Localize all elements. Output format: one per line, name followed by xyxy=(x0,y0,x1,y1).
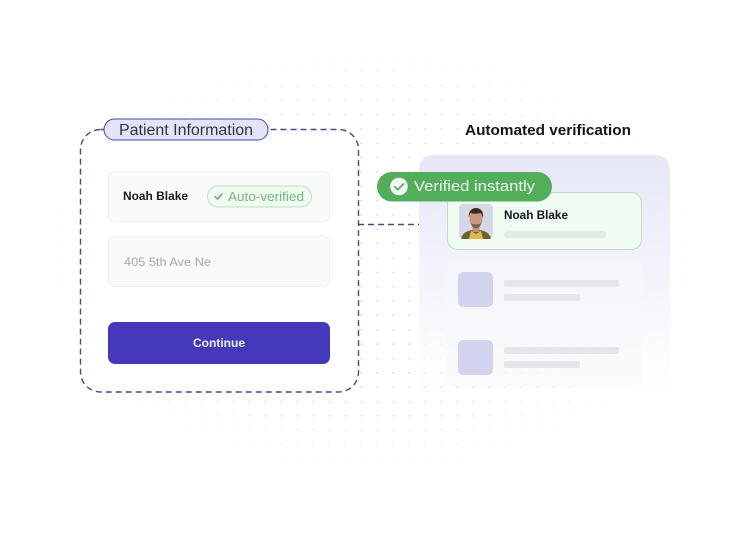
patient name: Noah Blake xyxy=(504,208,568,222)
skeleton row 1 xyxy=(447,260,642,319)
panel: automated verification xyxy=(419,155,670,417)
button: continue xyxy=(108,322,330,364)
button: continue: Continue xyxy=(193,336,245,350)
name field: Noah Blake xyxy=(123,189,188,203)
placeholder bar xyxy=(504,231,606,238)
address field xyxy=(108,236,330,286)
matched patient card xyxy=(448,192,642,250)
badge: auto-verified: Auto-verified xyxy=(228,190,304,204)
heading: automated verification: Automated verification xyxy=(465,123,631,139)
icon: check xyxy=(215,194,222,199)
infographic canvas xyxy=(56,56,682,474)
connector: dashed line xyxy=(358,224,419,226)
avatar photo xyxy=(459,204,493,239)
skeleton row 2 xyxy=(447,328,642,387)
badge: verified instantly: Verified instantly xyxy=(414,178,536,195)
dotted background xyxy=(56,56,682,474)
badge: auto-verified xyxy=(208,186,312,207)
address field: 405 5th Ave Ne xyxy=(124,255,211,269)
name field xyxy=(108,172,330,222)
icon: check circle xyxy=(390,178,408,195)
label pill: patient information xyxy=(104,119,268,140)
badge: verified instantly xyxy=(377,172,552,202)
label pill: patient information: Patient Information xyxy=(119,122,253,139)
panel: patient information form xyxy=(80,119,358,392)
